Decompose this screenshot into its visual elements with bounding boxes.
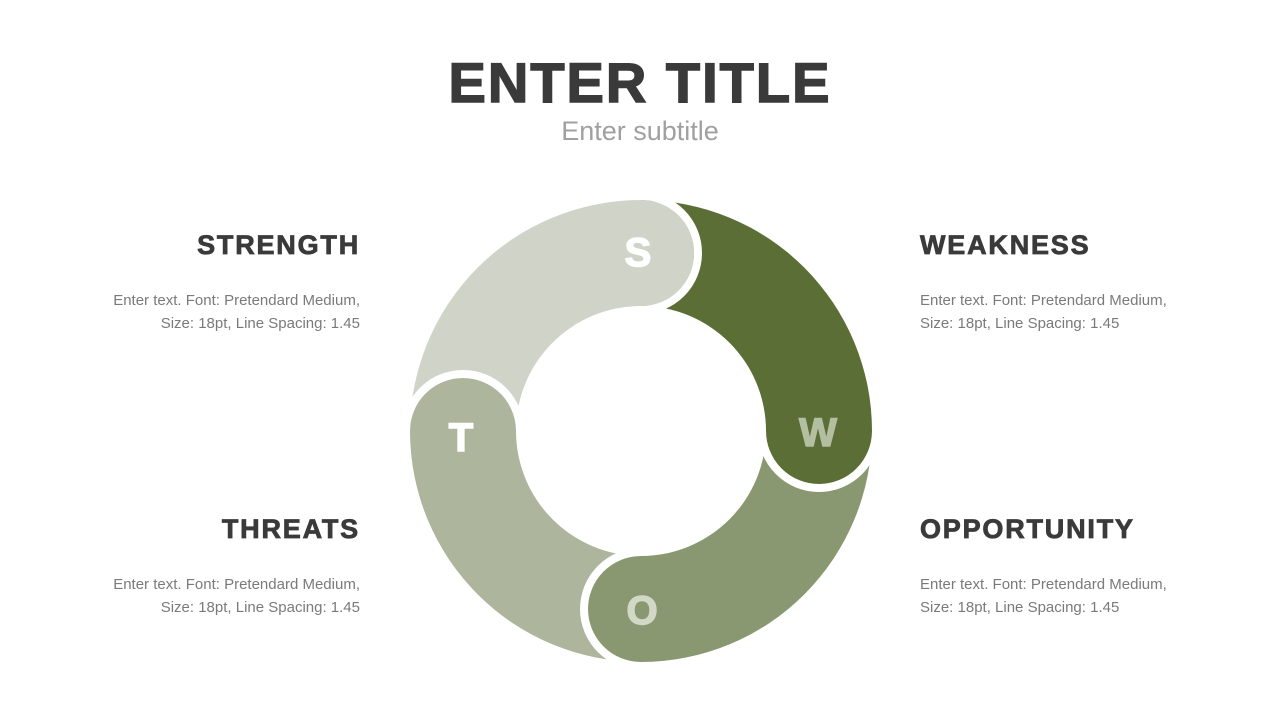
cap S: [641, 196, 698, 310]
letter W: W: [799, 411, 837, 455]
title: ENTER TITLE: [449, 51, 831, 114]
text: threats: Size: 18pt, Line Spacing: 1.45: [161, 599, 360, 616]
segment S body: [410, 200, 641, 431]
letter T: T: [449, 416, 473, 460]
subtitle: Enter subtitle: [561, 116, 719, 146]
heading: weakness: WEAKNESS: [920, 230, 1090, 260]
heading: opportunity: OPPORTUNITY: [920, 514, 1135, 544]
text: opportunity: [920, 576, 1167, 616]
cap T: [406, 374, 520, 431]
cap O: [584, 552, 641, 666]
heading: threats: THREATS: [222, 514, 360, 544]
text: weakness: Enter text. Font: Pretendard Medium,: [920, 292, 1167, 309]
text: weakness: [920, 292, 1167, 332]
segment W body: [641, 200, 872, 431]
text: threats: Enter text. Font: Pretendard Medium,: [113, 576, 360, 593]
segment T body: [410, 431, 641, 662]
text: opportunity: Size: 18pt, Line Spacing: 1.45: [920, 599, 1119, 616]
text: opportunity: Enter text. Font: Pretendard Medium,: [920, 576, 1167, 593]
text: threats: [113, 576, 360, 616]
text: strength: Enter text. Font: Pretendard Medium,: [113, 292, 360, 309]
text: strength: Size: 18pt, Line Spacing: 1.45: [161, 315, 360, 332]
segment O body: [641, 431, 872, 662]
letter S: S: [625, 231, 651, 275]
text: weakness: Size: 18pt, Line Spacing: 1.45: [920, 315, 1119, 332]
text: strength: [113, 292, 360, 332]
heading: strength: STRENGTH: [197, 230, 360, 260]
letter O: O: [626, 589, 658, 633]
cap W: [762, 431, 876, 488]
